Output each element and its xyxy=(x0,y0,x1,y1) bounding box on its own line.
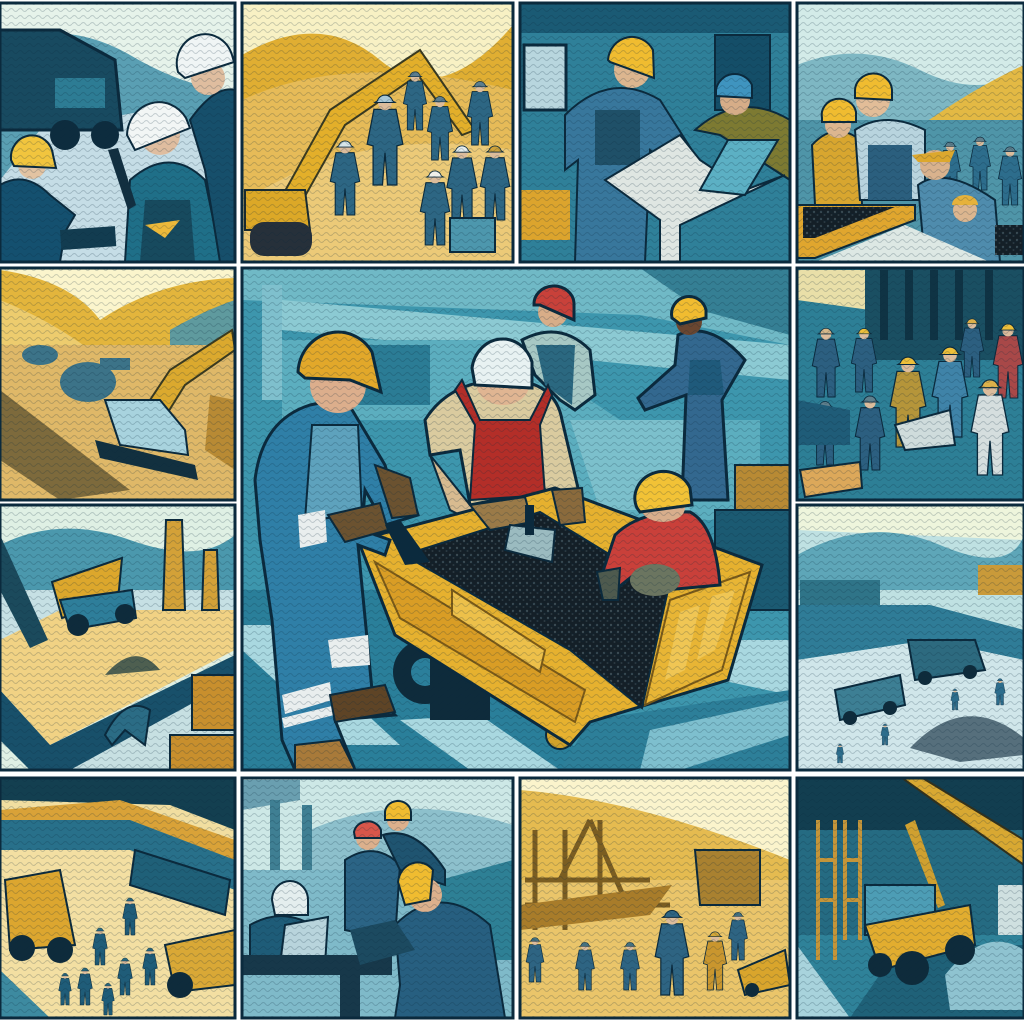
panel: excavator crew on golden hills xyxy=(242,3,513,262)
panel: three workers over paperwork with laptop xyxy=(242,778,513,1018)
seated worker xyxy=(695,74,790,180)
worker centre xyxy=(108,102,222,262)
excavator body xyxy=(245,190,312,256)
background sorting structure xyxy=(262,285,790,520)
small figures xyxy=(836,679,1005,763)
panel: plant with chimneys and dump truck xyxy=(0,505,235,770)
laptop xyxy=(280,917,328,965)
panel: crew gathered under rig xyxy=(797,268,1024,500)
floor rails xyxy=(242,625,790,770)
machinery right xyxy=(715,465,790,610)
panel: main scene, workers shovelling ore into yellow cart xyxy=(242,268,790,770)
building xyxy=(865,885,935,935)
truck right xyxy=(165,930,235,998)
crew xyxy=(526,910,747,995)
worker right xyxy=(177,34,235,262)
conveyor xyxy=(0,535,48,648)
worker in cart, red shirt xyxy=(597,472,720,600)
excavator xyxy=(95,330,235,480)
panel: snowy site with trucks xyxy=(797,505,1024,770)
laptop xyxy=(700,140,778,195)
cart xyxy=(358,488,762,749)
dump truck xyxy=(52,558,136,636)
headframe xyxy=(525,820,670,930)
floor xyxy=(242,590,600,770)
worker foreground left xyxy=(255,332,430,770)
chimneys xyxy=(163,520,219,610)
panel: engineers at laptop in blue cabin xyxy=(520,3,790,262)
crew xyxy=(940,137,1022,205)
ore pile xyxy=(105,656,160,675)
worker left xyxy=(0,135,116,262)
worker centre with red apron xyxy=(425,339,582,530)
cart wheels xyxy=(393,640,574,749)
crane boom xyxy=(870,752,1024,865)
small truck xyxy=(738,950,790,997)
panel: golden headframes and crew xyxy=(520,778,790,1018)
truck lower xyxy=(835,675,905,725)
towers xyxy=(818,820,860,960)
building xyxy=(130,850,230,915)
worker laptop xyxy=(250,881,320,965)
glove right xyxy=(552,488,585,525)
panel: inspection with tablets xyxy=(0,3,235,262)
gravel pile xyxy=(910,716,1024,762)
plant deck xyxy=(520,885,672,930)
excavator arm xyxy=(280,50,475,205)
desk xyxy=(242,955,392,1018)
truck xyxy=(0,30,122,150)
worker red helmet xyxy=(345,821,400,940)
machinery cluster xyxy=(22,345,130,402)
crate xyxy=(450,218,495,252)
panel: sorting ore outdoors xyxy=(797,3,1024,262)
crowd xyxy=(59,898,157,1015)
crew xyxy=(812,319,1023,475)
equipment top right xyxy=(978,565,1024,595)
worker centre xyxy=(855,74,925,200)
worker back right xyxy=(638,297,745,500)
shovel xyxy=(505,505,555,562)
crew xyxy=(330,72,510,245)
worker front xyxy=(350,862,505,1018)
panel: golden valley with excavator xyxy=(0,268,235,500)
foreground items xyxy=(797,400,955,497)
chimneys xyxy=(270,800,312,870)
worker left xyxy=(812,99,862,205)
crates xyxy=(170,675,235,770)
panel: open yard with trucks and crew xyxy=(0,778,235,1018)
dump truck xyxy=(865,905,975,985)
worker right xyxy=(912,150,1000,262)
panel: crane and yellow dump truck xyxy=(797,752,1024,1018)
worker xyxy=(105,706,150,745)
desk xyxy=(605,135,785,262)
worker yellow helmet back xyxy=(383,801,445,885)
truck top xyxy=(908,640,985,685)
ore tray xyxy=(797,205,1024,262)
truck left xyxy=(5,870,75,963)
glove left xyxy=(470,497,532,530)
worker standing xyxy=(565,37,695,262)
cabin xyxy=(695,850,760,905)
worker back centre xyxy=(522,286,595,410)
